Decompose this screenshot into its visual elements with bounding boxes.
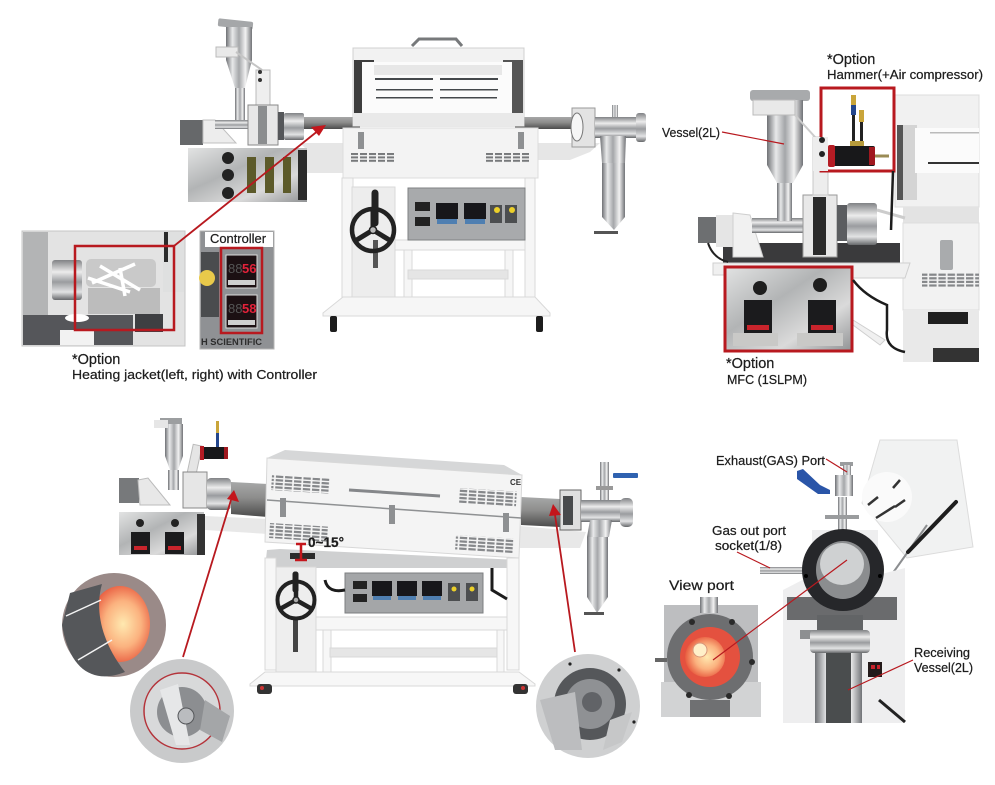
process tube — [205, 482, 586, 548]
heater display 1: 88 — [228, 261, 242, 276]
label: exhaust port — [716, 454, 847, 472]
label: receiving vessel: Vessel(2L) — [914, 661, 973, 675]
shelf — [713, 263, 910, 345]
control panel — [408, 188, 525, 240]
close-up: outlet flange — [536, 654, 640, 758]
transfer tube — [752, 218, 803, 233]
hammer — [200, 421, 228, 460]
label: MFC option — [726, 356, 807, 387]
close-up: heated tube end — [62, 573, 166, 677]
leader: view port — [713, 560, 847, 660]
cables — [325, 568, 507, 599]
furnace body — [265, 450, 522, 558]
left feeder assembly — [119, 418, 231, 555]
flange ring and tube — [802, 529, 884, 611]
label: vessel — [662, 126, 784, 144]
right exhaust assembly — [560, 462, 638, 615]
furnace behind — [895, 95, 979, 362]
feeder hopper — [216, 18, 270, 121]
label: gas out port — [712, 524, 787, 568]
gas out port valve — [760, 567, 806, 574]
gas plate with flowmeters — [188, 148, 307, 202]
tilt angle mark — [295, 534, 344, 560]
control panel — [345, 573, 483, 613]
inset: controller photo — [199, 231, 274, 349]
label: vessel: Vessel(2L) — [662, 126, 720, 140]
label: hammer option: Hammer(+Air compressor) — [827, 68, 983, 82]
open lid panel — [862, 440, 973, 558]
dark mounting plate — [723, 243, 900, 263]
furnace body: CE — [510, 478, 522, 487]
caption: heating jacket option: Heating jacket(left, right) with Controller — [72, 368, 317, 382]
caption: heating jacket option — [72, 352, 317, 382]
heater display 2 — [226, 295, 257, 328]
label: receiving vessel — [848, 646, 973, 690]
arrow: outlet tube to outlet close-up — [549, 504, 575, 652]
handwheel — [352, 190, 394, 268]
label: MFC option: *Option — [726, 356, 774, 372]
inset: heating jacket photo — [22, 231, 185, 346]
open lid — [353, 39, 524, 126]
caption: heating jacket option: *Option — [72, 352, 120, 368]
stand top — [265, 549, 519, 568]
MFC option — [725, 267, 852, 351]
rear body — [783, 530, 905, 723]
rear view of exhaust end — [760, 440, 973, 723]
handwheel — [278, 572, 314, 652]
stand frame — [323, 178, 550, 316]
exhaust valve — [797, 462, 859, 537]
furnace with open lid: top view — [180, 18, 646, 332]
stand frame — [250, 558, 535, 686]
receiving vessel — [810, 615, 870, 723]
label: Controller: Controller — [210, 232, 266, 246]
label: view port: View port — [669, 578, 734, 593]
casters — [257, 684, 528, 694]
label: gas out port: socket(1/8) — [715, 539, 782, 553]
casters — [330, 316, 543, 332]
heater display 2: 58 — [242, 301, 256, 316]
close-up: inlet flange — [130, 659, 234, 763]
feeder drive and block — [180, 105, 304, 145]
label: exhaust port: Exhaust(GAS) Port — [716, 454, 826, 468]
feeder block — [803, 195, 905, 257]
lower body — [343, 128, 538, 178]
exhaust assembly — [571, 105, 646, 234]
label: gas out port: Gas out port — [712, 524, 787, 538]
motor — [698, 213, 763, 262]
inset: view port photo — [655, 597, 761, 717]
process tube — [300, 117, 575, 129]
label: hammer option — [827, 52, 983, 82]
heater display 1: 56 — [242, 261, 256, 276]
furnace tilted closed: bottom view — [119, 418, 638, 694]
side rails — [300, 143, 600, 173]
label: receiving vessel: Receiving — [914, 646, 970, 660]
callout box: heating jacket — [75, 246, 174, 330]
hammer option — [813, 88, 894, 171]
arrow: inlet tube to inlet close-up — [183, 490, 239, 657]
arrow: heating jacket to tube — [174, 125, 326, 246]
close-up: feeder side — [698, 88, 979, 362]
inset: controller photo: H SCIENTIFIC — [201, 337, 262, 348]
label: hammer option: *Option — [827, 52, 875, 68]
tilt angle mark: 0~15° — [308, 534, 344, 550]
heater display 2: 88 — [228, 301, 242, 316]
gas spring — [890, 525, 927, 577]
heater display 1 — [226, 255, 257, 288]
label: MFC option: MFC (1SLPM) — [727, 373, 807, 387]
cables — [853, 171, 905, 352]
gas spring cylinder — [908, 502, 956, 552]
vessel hopper — [750, 90, 828, 221]
